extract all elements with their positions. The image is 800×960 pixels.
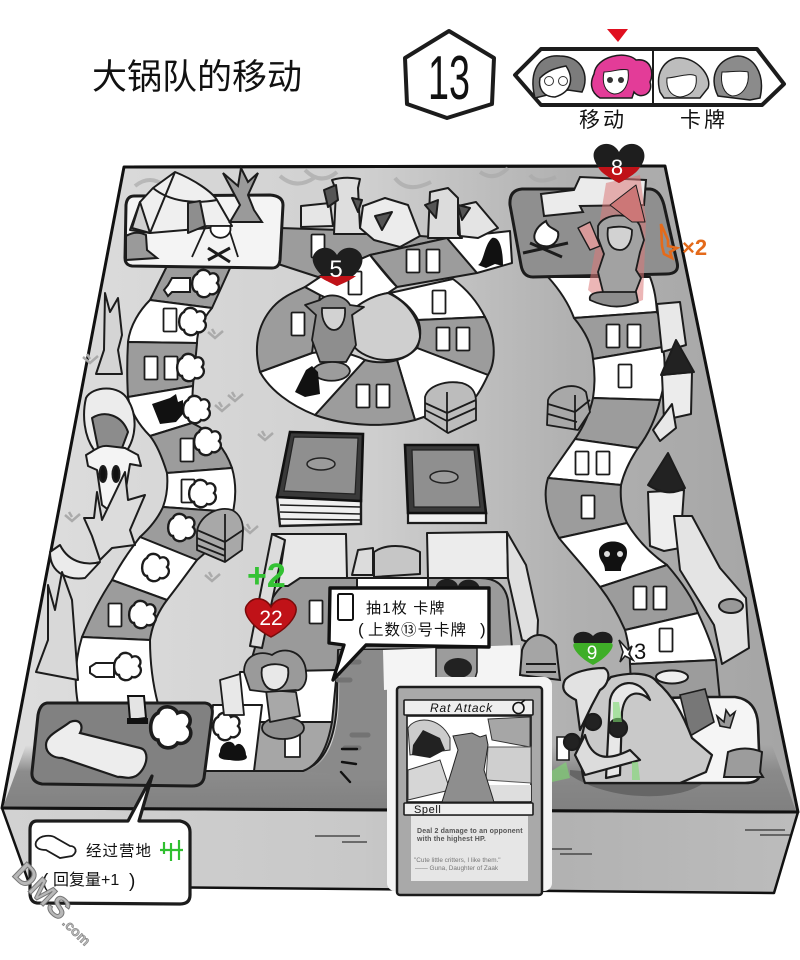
round number hexagon: 13 [428, 44, 470, 113]
game board [2, 144, 798, 904]
turn order indicator [515, 29, 784, 132]
camp: upper-right campfire [510, 177, 678, 277]
face: dark hair hero [714, 56, 761, 100]
heart HP 8 [594, 144, 644, 183]
track: left path [76, 266, 235, 704]
chest: left [197, 509, 243, 562]
centre statue [295, 295, 364, 397]
hero statue [220, 650, 306, 757]
callout: draw a card: ( [358, 620, 364, 639]
callout: draw a card: ) [480, 620, 486, 639]
card description: with the highest HP. [416, 836, 486, 843]
heal +2: +2 [247, 557, 286, 595]
icon: campfire [523, 221, 568, 257]
towers [648, 302, 749, 664]
heart HP 5: 5 [329, 256, 343, 283]
camp: upper-left [125, 168, 283, 268]
deck: left [277, 432, 363, 526]
icon: cloud [151, 707, 191, 748]
icon: skull [599, 542, 627, 571]
hidden statue below callout [435, 579, 480, 682]
track: right path [546, 277, 720, 705]
decor: leaf [717, 710, 735, 728]
callout: pass camp heal: ( [42, 871, 49, 892]
callout: draw a card: 上数⑬号卡牌 [368, 621, 467, 639]
callout: pass camp heal: 回复量+1 [53, 871, 119, 889]
callout: pass camp heal: ) [129, 871, 135, 892]
title: 大锅队的移动 [92, 58, 302, 97]
card type bar: Spell [414, 804, 441, 816]
icon: green healing tally [160, 840, 183, 861]
enemy statue with red glow [578, 175, 646, 307]
watermark: DMS [6, 856, 77, 927]
decor: fence [680, 689, 714, 736]
face: grey hair hero [659, 58, 709, 98]
statue figure [578, 185, 645, 307]
card description [411, 816, 528, 881]
deck: right [405, 445, 486, 523]
track: centre spiral [257, 228, 512, 425]
bone monster and dead trees [36, 293, 145, 680]
monster boss [557, 668, 763, 796]
heart HP 22: 22 [259, 607, 283, 630]
card description: Deal 2 damage to an opponent [417, 828, 523, 835]
heart HP 8: 8 [611, 155, 623, 180]
icon: ink blob [295, 366, 320, 397]
watermark [6, 856, 103, 952]
monster attack +3 [619, 639, 646, 664]
icon: red turn marker [607, 29, 628, 42]
card title bar: Rat Attack [430, 701, 493, 715]
round number hexagon [405, 31, 494, 118]
castle walls and small chest [250, 532, 538, 648]
icon: lantern [127, 696, 148, 724]
ruins [301, 178, 498, 247]
icon: tent [130, 172, 232, 233]
decor: bread [656, 670, 688, 684]
icon: wolf head [152, 394, 183, 424]
card description: —— Guna, Daughter of Zaak [415, 865, 499, 872]
heart HP 22 [246, 599, 296, 637]
card title bar [404, 700, 533, 715]
callout: pass camp heal [30, 776, 190, 904]
watermark: .com [59, 914, 94, 949]
heart HP 9: 9 [587, 643, 597, 664]
face: pink hair hero [592, 55, 652, 98]
icon: ghost [478, 238, 503, 268]
callout: draw a card [329, 588, 489, 680]
board front face [2, 808, 798, 893]
card description: "Cute little critters, I like them." [414, 857, 501, 864]
chest: right [547, 386, 590, 430]
icon: broken wall [541, 177, 646, 216]
icon: dead tree [223, 168, 262, 222]
green glow [550, 702, 640, 782]
monster body [563, 668, 712, 783]
icon: scroll [46, 721, 146, 778]
callout: draw a card: 抽1枚 卡牌 [366, 600, 446, 617]
decor: stump [724, 748, 763, 777]
card type bar [404, 803, 533, 816]
heart HP 9 [573, 632, 613, 665]
cards and icons on tiles [90, 234, 672, 680]
label: move: 移动 [579, 109, 627, 132]
chest: lower right [520, 635, 560, 680]
icon: scroll [36, 836, 76, 858]
camp: lower-left with scroll [32, 696, 212, 786]
track: lower path [205, 578, 525, 780]
sword attack x2 [661, 224, 707, 260]
callout: pass camp heal: 经过营地 [86, 842, 152, 860]
chest: middle [425, 382, 476, 433]
ink pile and cloud [213, 713, 247, 761]
label: card: 卡牌 [680, 109, 728, 132]
card artwork [407, 716, 531, 802]
sword attack x2: ×2 [682, 235, 707, 260]
monster attack +3: 3 [634, 639, 646, 664]
icon: stump [126, 233, 157, 260]
board top surface [2, 166, 798, 812]
card: Rat Attack [387, 677, 552, 895]
face: brown hair hero [533, 56, 585, 98]
heart HP 5 [313, 248, 362, 286]
icon: cooking pot [192, 226, 238, 262]
motion marks [341, 749, 357, 782]
